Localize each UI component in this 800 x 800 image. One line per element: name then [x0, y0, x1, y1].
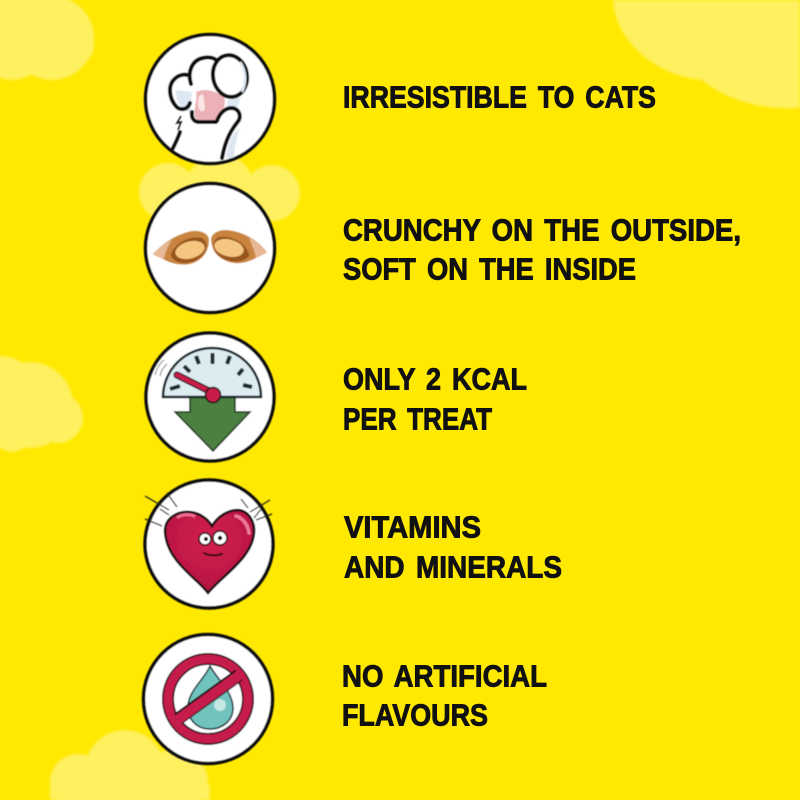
icon: smiling heart [145, 480, 273, 608]
paw pad [195, 90, 225, 122]
paw shading [176, 90, 192, 113]
cloud: bottom [50, 730, 210, 800]
icon: calorie gauge [146, 333, 274, 461]
cloud: top right [613, 0, 800, 108]
text: flavours line 1: NO ARTIFICIAL [342, 658, 547, 694]
left treat [153, 231, 209, 265]
water drop [188, 666, 233, 729]
gauge needle [177, 375, 213, 393]
heart face [199, 531, 227, 555]
text: kcal line 2: PER TREAT [343, 402, 492, 436]
prohibition sign [168, 659, 248, 739]
heart highlights [236, 516, 249, 533]
gauge ticks [170, 353, 252, 389]
text: vitamins line 2: AND MINERALS [344, 550, 562, 584]
green arrow [175, 396, 250, 451]
gauge dial [163, 348, 261, 397]
cloud: middle [139, 154, 300, 222]
text: vitamins line 1: VITAMINS [344, 510, 481, 544]
text: crunchy line 1: CRUNCHY ON THE OUTSIDE, [343, 212, 741, 248]
cloud: left [0, 356, 83, 452]
text: irresistible: IRRESISTIBLE TO CATS [343, 80, 656, 114]
wrist marks [177, 116, 181, 130]
right treat [211, 230, 267, 263]
icon: no artificial flavours [144, 634, 272, 764]
heart shape [165, 510, 254, 593]
big toe highlight [240, 62, 245, 92]
rays [145, 493, 272, 526]
text: crunchy line 2: SOFT ON THE INSIDE [343, 252, 636, 286]
paw toes [170, 52, 250, 158]
motion marks [155, 360, 167, 376]
cloud: top left [0, 0, 94, 80]
icon: cat paw [146, 34, 274, 164]
text: kcal line 1: ONLY 2 KCAL [343, 362, 527, 396]
icon: crunchy treats [146, 184, 274, 312]
text: flavours line 2: FLAVOURS [342, 698, 488, 732]
